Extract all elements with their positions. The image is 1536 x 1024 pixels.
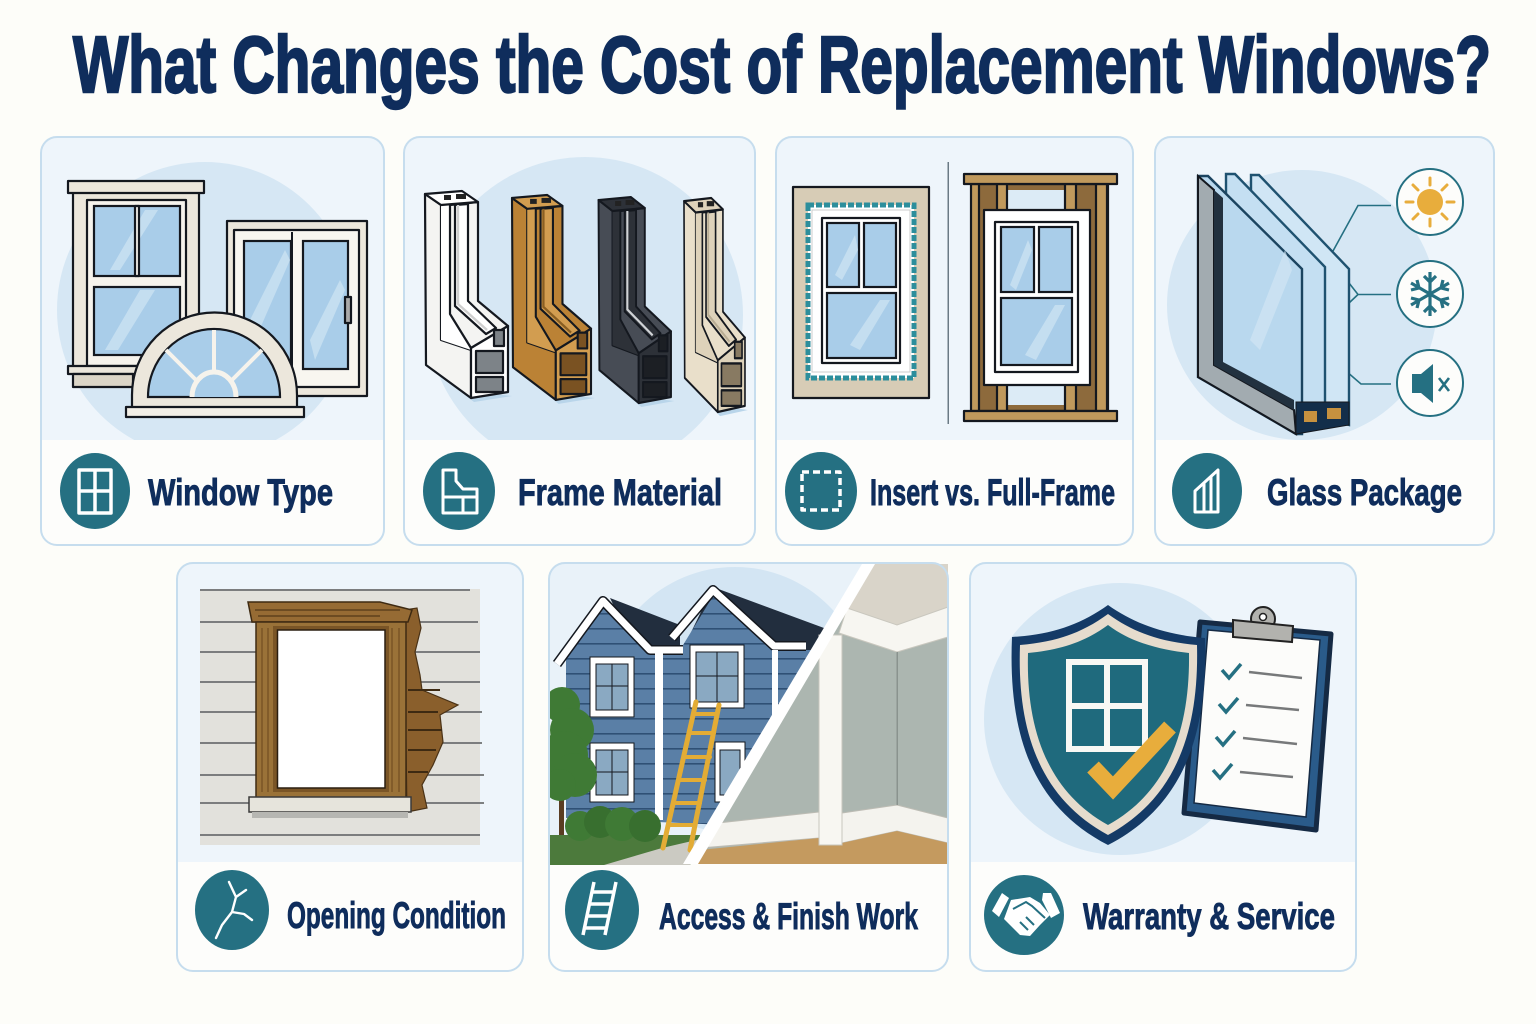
icon: frame profile: [423, 452, 495, 530]
illustration: interior room: [695, 564, 948, 864]
illustration: clipboard: [1184, 607, 1331, 830]
checklist: [1213, 664, 1302, 778]
icon: snowflake: [1397, 261, 1463, 327]
icon: mute speaker: [1397, 350, 1463, 416]
icon: dashed square: [785, 452, 857, 530]
connector lines: [1333, 206, 1391, 384]
illustration: arched window: [126, 312, 304, 417]
tree and shrubs: [540, 687, 661, 842]
label: Warranty & Service: [1083, 896, 1335, 937]
house body: [557, 587, 840, 830]
label: Glass Package: [1267, 472, 1462, 513]
panel: opening condition: [177, 563, 523, 971]
icon: sun: [1397, 169, 1463, 235]
profile: white vinyl: [425, 191, 512, 402]
illustration: siding wall: [200, 589, 484, 845]
label: Frame Material: [518, 472, 722, 513]
profile: dark aluminium: [599, 197, 674, 407]
label: Insert vs. Full-Frame: [870, 472, 1115, 513]
panel: warranty and service: [970, 563, 1356, 971]
label: Window Type: [148, 472, 333, 513]
divider: [948, 162, 949, 424]
windows: [590, 645, 745, 802]
label: Opening Condition: [287, 895, 506, 936]
illustration: wood window opening: [248, 602, 412, 818]
profile: cream composite: [684, 198, 748, 416]
illustration: full-frame window: [964, 174, 1117, 421]
diagonal divider: [683, 564, 875, 864]
illustration: house exterior: [540, 587, 840, 865]
illustration: insert window: [793, 187, 929, 398]
label: Access & Finish Work: [659, 896, 918, 937]
icon: glass panes: [1172, 453, 1242, 529]
illustration: sliding window: [227, 221, 367, 396]
panel: insert vs full-frame: [776, 137, 1133, 545]
panel: window type: [41, 137, 384, 545]
icon: crack: [195, 870, 269, 950]
icon: ladder: [565, 870, 639, 950]
panel: glass package: [1155, 137, 1494, 545]
illustration: rotted framing: [404, 608, 458, 812]
ladder: [663, 702, 719, 850]
icon: handshake: [984, 875, 1064, 955]
illustration: shield: [1012, 605, 1205, 845]
panel: frame material: [404, 137, 755, 545]
illustration: triple-pane glass: [1198, 174, 1349, 434]
illustration: double-hung window: [68, 181, 204, 387]
profile: wood: [512, 195, 595, 404]
panel: access and finish work: [540, 563, 948, 971]
icon: window: [60, 453, 130, 529]
